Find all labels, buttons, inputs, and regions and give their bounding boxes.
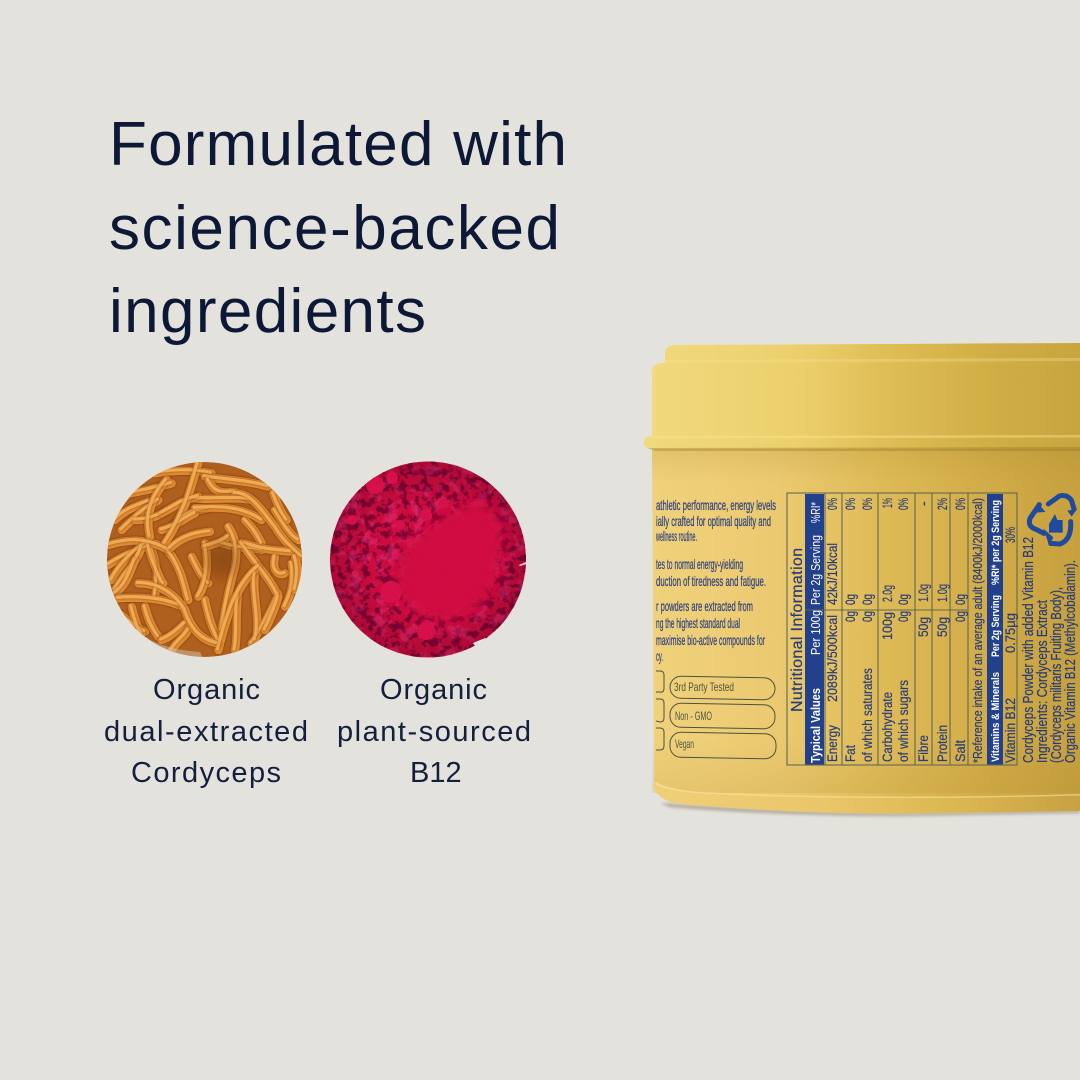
table header text: %RI* bbox=[808, 502, 823, 523]
caption: B12: Organic bbox=[380, 674, 487, 706]
ingredient photo: red B12 powder bbox=[328, 460, 528, 660]
label: claim pills: Non - GMO bbox=[675, 709, 712, 723]
table rows: 0% bbox=[952, 498, 968, 510]
caption: B12 bbox=[337, 674, 531, 789]
table rows: 2% bbox=[934, 498, 950, 510]
heading bbox=[109, 110, 567, 346]
caption: B12: B12 bbox=[410, 757, 462, 789]
heading: science-backed bbox=[109, 194, 560, 263]
label: product description text bbox=[656, 497, 776, 664]
table rows: 100g bbox=[879, 612, 895, 640]
tin body bbox=[652, 448, 1080, 797]
vitamins header text: Vitamins & Minerals bbox=[990, 672, 1002, 762]
vitamin row bbox=[1002, 527, 1018, 763]
tin lid wall bbox=[652, 362, 1080, 438]
lid edge highlight bbox=[662, 358, 1080, 363]
vitamins header text: Per 2g Serving bbox=[990, 595, 1002, 657]
table rows: 0% bbox=[824, 498, 840, 510]
label: product description text: cy. bbox=[656, 648, 663, 664]
heading: ingredients bbox=[109, 277, 426, 346]
table rows: 50g bbox=[915, 617, 931, 637]
label: product description text: ially crafted for optimal quality and bbox=[656, 513, 771, 529]
tin shadow bbox=[660, 803, 1080, 816]
caption: cordyceps bbox=[104, 674, 308, 789]
table rows: 0g bbox=[842, 594, 858, 605]
table rows: Protein bbox=[934, 725, 950, 762]
ingredients list: (Cordyceps militaris Fruiting Body), bbox=[1048, 587, 1065, 763]
ingredients list: Ingredients: Cordyceps Extract bbox=[1034, 599, 1051, 763]
label: product description text: athletic performance, energy levels bbox=[656, 497, 776, 513]
table rows: 0g bbox=[859, 594, 875, 605]
table rows: *Reference intake of an average adult (8400kJ/2000kcal) bbox=[971, 498, 985, 763]
table rows: 1.0g bbox=[915, 584, 931, 602]
product tin bbox=[644, 343, 1080, 816]
label: product description text: maximise bio-active compounds for bbox=[656, 632, 765, 648]
caption: cordyceps: Cordyceps bbox=[131, 757, 281, 789]
table rows: 2089kJ/500kcal bbox=[824, 615, 840, 702]
table rows: 1.0g bbox=[934, 584, 950, 602]
table rows: Salt bbox=[952, 740, 968, 762]
table rows: 0g bbox=[895, 594, 911, 605]
table header text: Typical Values bbox=[808, 688, 823, 763]
table title: Nutritional Information bbox=[789, 548, 806, 712]
table rows: 0g bbox=[842, 611, 858, 622]
vitamins header text: %RI* per 2g Serving bbox=[990, 500, 1002, 585]
table rows: 0% bbox=[895, 498, 911, 510]
ingredients list bbox=[1020, 537, 1079, 763]
vitamin row: Vitamin B12 bbox=[1002, 698, 1018, 763]
table rows: - bbox=[915, 501, 931, 506]
table rows: Fibre bbox=[915, 735, 931, 762]
ingredient photo: cordyceps bbox=[107, 462, 302, 662]
table rows: 50g bbox=[934, 617, 950, 637]
heading: Formulated with bbox=[109, 110, 567, 179]
table rows: Carbohydrate bbox=[879, 692, 895, 762]
table grid bbox=[787, 493, 1017, 765]
icon: recycling symbol bbox=[1029, 496, 1077, 546]
vitamins header text bbox=[990, 500, 1002, 762]
table rows: 0% bbox=[842, 498, 858, 510]
table rows: Energy bbox=[824, 725, 840, 762]
table header bands bbox=[805, 494, 1003, 765]
table rows bbox=[824, 498, 985, 763]
label: claim pills bbox=[656, 671, 776, 759]
caption: cordyceps: Organic bbox=[153, 674, 260, 706]
ingredients list: Cordyceps Powder with added Vitamin B12 bbox=[1020, 537, 1037, 763]
table header text: Per 2g Serving bbox=[808, 535, 823, 605]
ingredients list: Organic Vitamin B12 (Methylcobalamin). bbox=[1062, 560, 1079, 763]
label: product description text: ng the highest standard dual bbox=[656, 615, 740, 631]
table rows: of which saturates bbox=[859, 668, 875, 762]
label: product description text: r powders are extracted from bbox=[656, 598, 753, 614]
lid rim bbox=[644, 435, 1080, 449]
table rows: 0g bbox=[952, 611, 968, 622]
caption: cordyceps: dual-extracted bbox=[104, 716, 308, 748]
table rows: 2.0g bbox=[879, 585, 895, 602]
label: claim pills: 3rd Party Tested bbox=[674, 680, 734, 694]
nutrition table bbox=[787, 493, 1018, 765]
label: product description text: duction of tiredness and fatigue. bbox=[656, 573, 766, 589]
vitamin row: 30% bbox=[1002, 527, 1018, 543]
tin base rim bbox=[653, 782, 1080, 814]
nutrition table: 1% bbox=[879, 498, 895, 508]
label: product description text: tes to normal energy-yielding bbox=[656, 556, 743, 572]
table header text bbox=[808, 502, 823, 763]
table rows: 0% bbox=[859, 498, 875, 510]
caption: B12: plant-sourced bbox=[337, 716, 531, 748]
table rows: 0g bbox=[895, 611, 911, 622]
label: claim pills: Vegan bbox=[675, 737, 694, 751]
label: product description text: wellness routine. bbox=[656, 528, 697, 544]
table rows: Fat bbox=[842, 745, 858, 762]
table rows: 42kJ/10kcal bbox=[824, 543, 840, 605]
tin lid top bbox=[665, 343, 1080, 364]
vitamin row: 0.75µg bbox=[1002, 613, 1018, 653]
table rows: 0g bbox=[859, 611, 875, 622]
table rows: 0g bbox=[952, 594, 968, 605]
smooth pressed powder patch bbox=[396, 499, 503, 621]
table header text: Per 100g bbox=[808, 610, 823, 655]
table rows: of which sugars bbox=[895, 680, 911, 762]
